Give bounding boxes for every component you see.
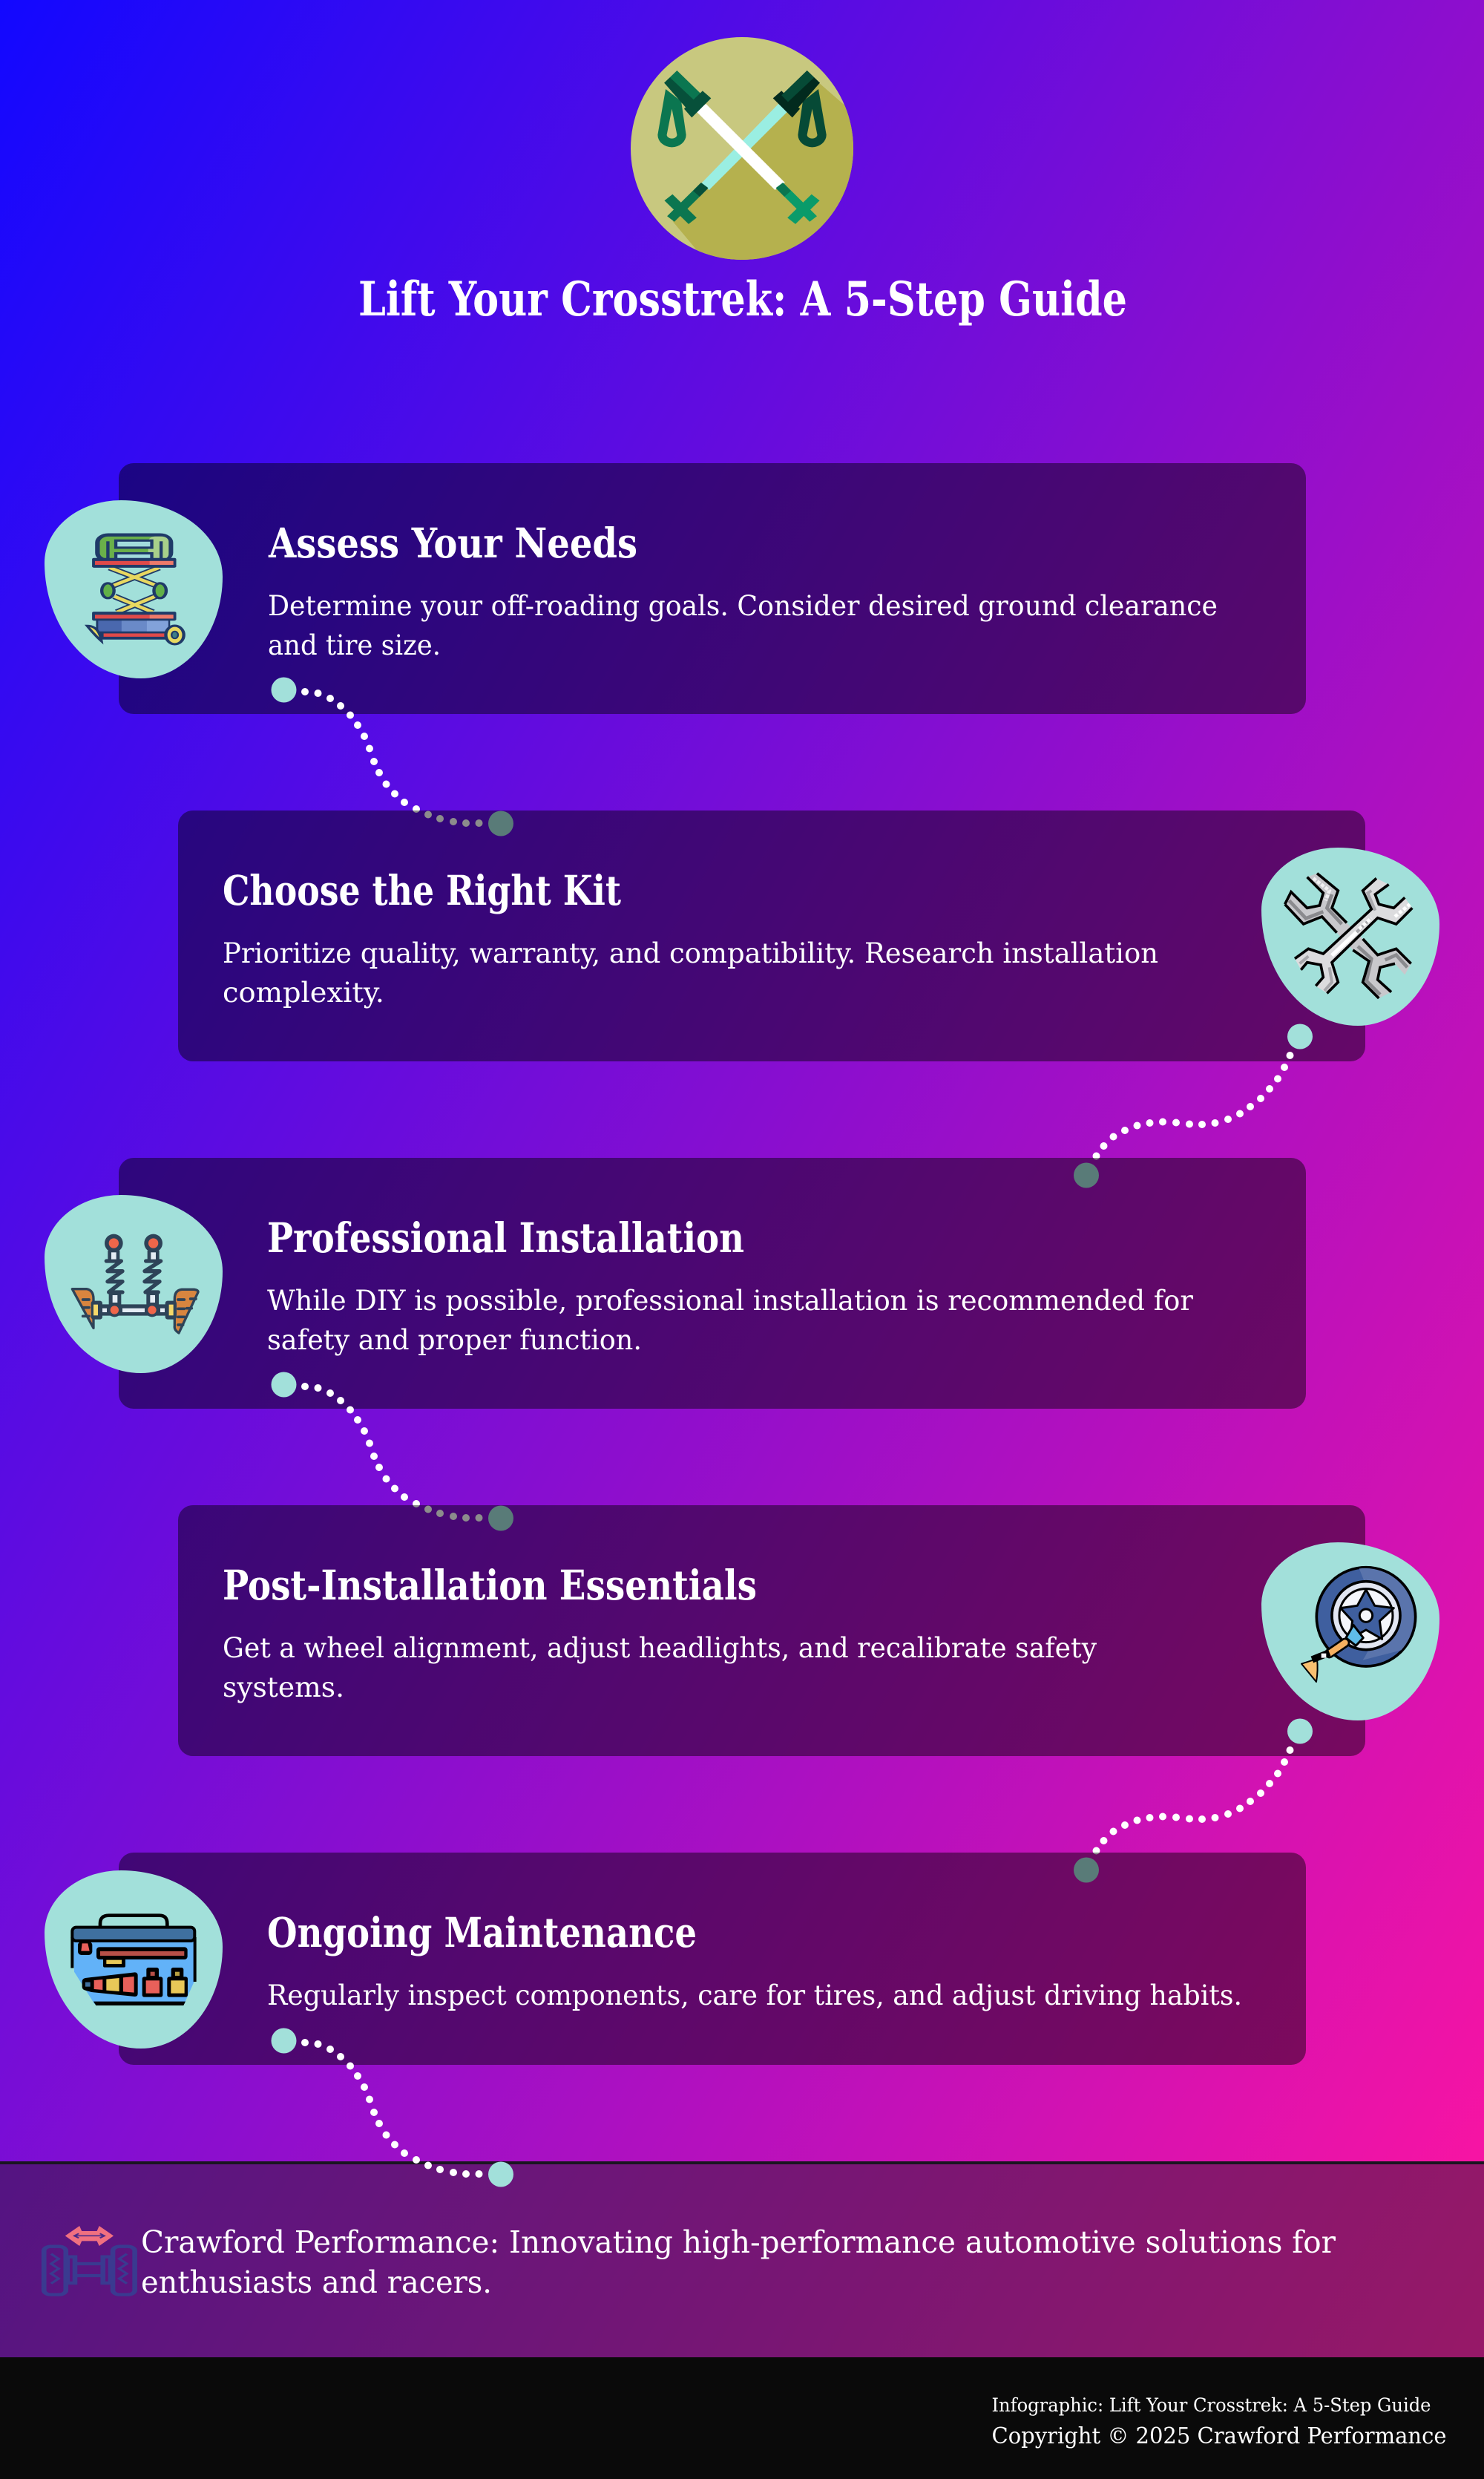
heading: step 1: Assess Your Needs: [268, 519, 637, 567]
connector: step 4 to step 5: [1074, 1719, 1313, 1882]
panel: step 1 assess your needs: [45, 463, 1306, 714]
text: step 4 body: Get a wheel alignment, adjust headlights, and recalibrate safety: [223, 1632, 1097, 1664]
title: Lift Your Crosstrek: A 5-Step Guide: [358, 272, 1127, 327]
heading: step 5: Ongoing Maintenance: [267, 1908, 697, 1956]
text: step 5 body: Regularly inspect components, care for tires, and adjust driving habits.: [267, 1979, 1242, 2011]
icon: crossed trekking poles logo: [631, 37, 853, 260]
heading: step 2: Choose the Right Kit: [223, 866, 621, 914]
icon: suspension on blob: [45, 1195, 223, 1373]
icon: scissor lift on blob: [45, 500, 223, 678]
heading: step 4: Post-Installation Essentials: [223, 1561, 757, 1609]
text: step 1 body: [268, 590, 1218, 661]
icon: tool bag on blob: [45, 1870, 223, 2049]
connector: step 3 to step 4: [272, 1372, 513, 1530]
text: step 4 body: systems.: [223, 1671, 344, 1703]
text: footer credit: Infographic: Lift Your Crosstrek: A 5-Step Guide: [991, 2394, 1431, 2416]
panel: step 5 ongoing maintenance: [45, 1853, 1306, 2065]
text: step 3 body: [267, 1285, 1193, 1356]
icon: crossed wrenches on blob: [1261, 848, 1439, 1026]
panel: step 2 choose the right kit: [178, 810, 1439, 1061]
text: step 1 body: Determine your off-roading goals. Consider desired ground clearance: [268, 590, 1218, 622]
connector: step 1 to step 2: [272, 677, 513, 836]
panel: step 3 professional installation: [45, 1158, 1306, 1409]
text: step 3 body: While DIY is possible, professional installation is recommended for: [267, 1285, 1193, 1317]
panel: footer: [0, 2357, 1484, 2479]
text: step 2 body: complexity.: [223, 977, 384, 1009]
connector: step 5 to company bar: [272, 2028, 513, 2187]
text: step 4 body: [223, 1632, 1097, 1703]
icon: wheel and brush on blob: [1261, 1542, 1439, 1720]
text: step 1 body: and tire size.: [268, 629, 441, 661]
text: copyright: Copyright © 2025 Crawford Performance: [991, 2423, 1447, 2449]
connector: step 2 to step 3: [1074, 1024, 1313, 1188]
text: step 3 body: safety and proper function.: [267, 1324, 642, 1356]
text: company description: [141, 2224, 1336, 2300]
panel: company bar: [0, 2161, 1484, 2357]
text: company description: Crawford Performance: Innovating high-performance automotive solutions for: [141, 2224, 1336, 2260]
text: step 2 body: [223, 937, 1158, 1009]
heading: step 3: Professional Installation: [267, 1214, 744, 1262]
text: step 2 body: Prioritize quality, warranty, and compatibility. Research installation: [223, 937, 1158, 969]
panel: step 4 post-installation essentials: [178, 1505, 1439, 1756]
text: company description: enthusiasts and racers.: [141, 2264, 492, 2300]
icon: axle with width arrow: [44, 2226, 135, 2295]
